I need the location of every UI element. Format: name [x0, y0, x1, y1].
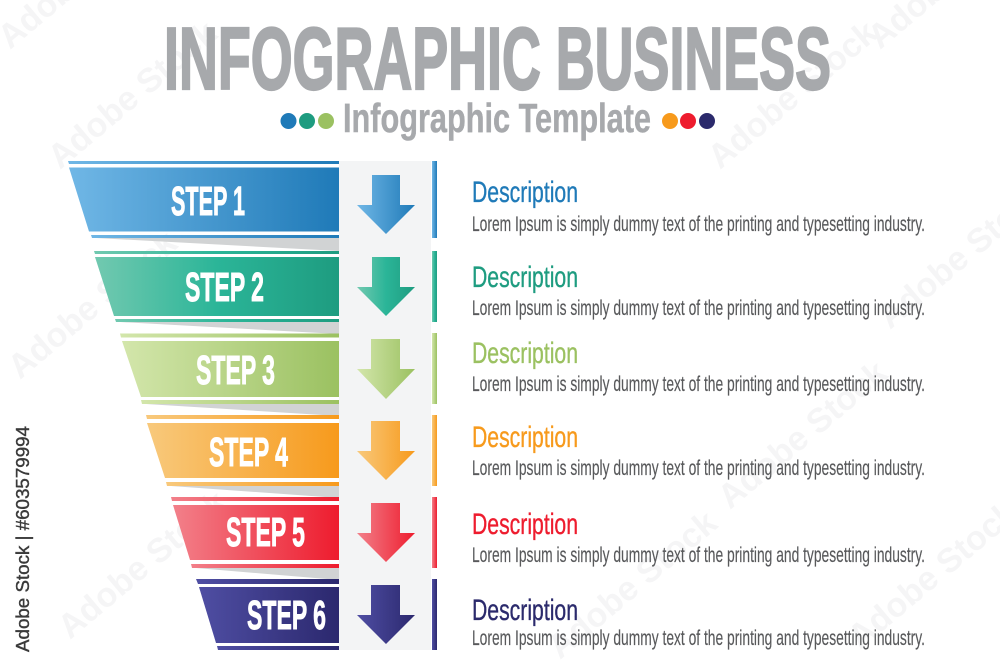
funnel band 1 [68, 161, 339, 238]
arrow 4 [357, 421, 415, 480]
arrow 5 [357, 503, 415, 562]
watermark: Adobe Stock [711, 353, 894, 516]
arrow 1 [357, 175, 415, 234]
dots: left [280, 113, 334, 129]
centre arrow column [339, 161, 431, 650]
funnel band 2 [94, 251, 339, 322]
description 2 [472, 261, 925, 320]
label 3: STEP 3 [196, 347, 275, 393]
description 4 [472, 421, 925, 480]
description 5: Description [472, 508, 578, 541]
description 6 [472, 594, 925, 650]
subtitle: Infographic Template [343, 95, 651, 141]
dots: right [662, 113, 715, 129]
step 4 [146, 415, 925, 486]
arrow 2 [357, 257, 415, 316]
subtitle row [280, 95, 715, 141]
step 2 [94, 251, 925, 322]
funnel band 3 [120, 334, 339, 404]
funnel band 5 [171, 497, 339, 568]
colour bar 2 [432, 251, 437, 322]
description 6: Description [472, 594, 578, 627]
watermark: Adobe Stock [41, 13, 224, 176]
step 5 [171, 497, 925, 568]
step 1 [68, 161, 925, 238]
description 3 [472, 337, 925, 396]
colour bar 3 [432, 333, 437, 404]
description 2: Description [472, 261, 578, 294]
label 5: STEP 5 [226, 509, 305, 555]
shadows between steps [96, 238, 339, 580]
description 4: Description [472, 421, 578, 454]
side credit: Adobe Stock | #603579994 [13, 426, 33, 652]
funnel band 6 [196, 579, 339, 650]
colour bar 4 [432, 415, 437, 486]
step 6 [196, 579, 925, 650]
label 6: STEP 6 [247, 592, 326, 638]
colour bar 1 [432, 161, 437, 238]
colour bar 6 [432, 579, 437, 650]
watermark: Adobe Stock [701, 13, 884, 176]
step 3 [120, 333, 925, 404]
funnel band 4 [146, 415, 339, 486]
label 2: STEP 2 [185, 264, 264, 310]
arrow 3 [357, 339, 415, 399]
description 3: Description [472, 337, 578, 370]
description 1 [472, 176, 925, 236]
description 1: Description [472, 176, 578, 209]
watermark: Adobe Stock [541, 503, 724, 666]
colour bar 5 [432, 497, 437, 568]
description 5 [472, 508, 925, 567]
arrow 6 [357, 585, 415, 644]
label 4: STEP 4 [209, 429, 288, 475]
watermark: Adobe Stock [1, 223, 184, 386]
watermark: Adobe Stock [51, 483, 234, 646]
label 1: STEP 1 [171, 178, 245, 224]
